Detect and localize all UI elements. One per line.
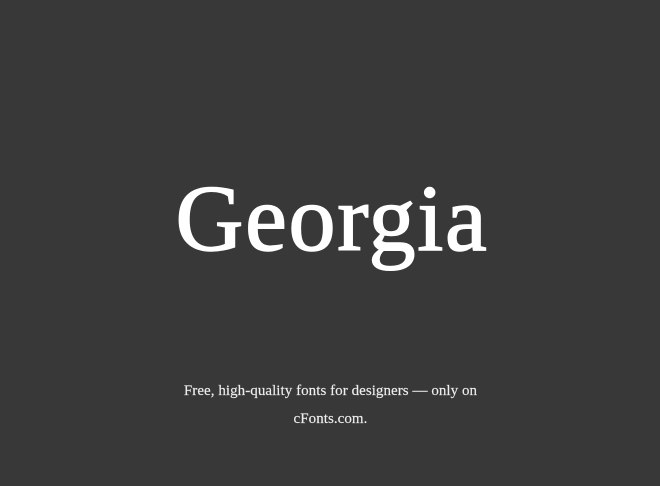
title: Georgia	[176, 167, 488, 271]
subtitle text block: Free, high-quality fonts for designers — only on	[184, 383, 477, 399]
subtitle text block: cFonts.com.	[294, 411, 367, 427]
subtitle text block	[184, 383, 477, 427]
